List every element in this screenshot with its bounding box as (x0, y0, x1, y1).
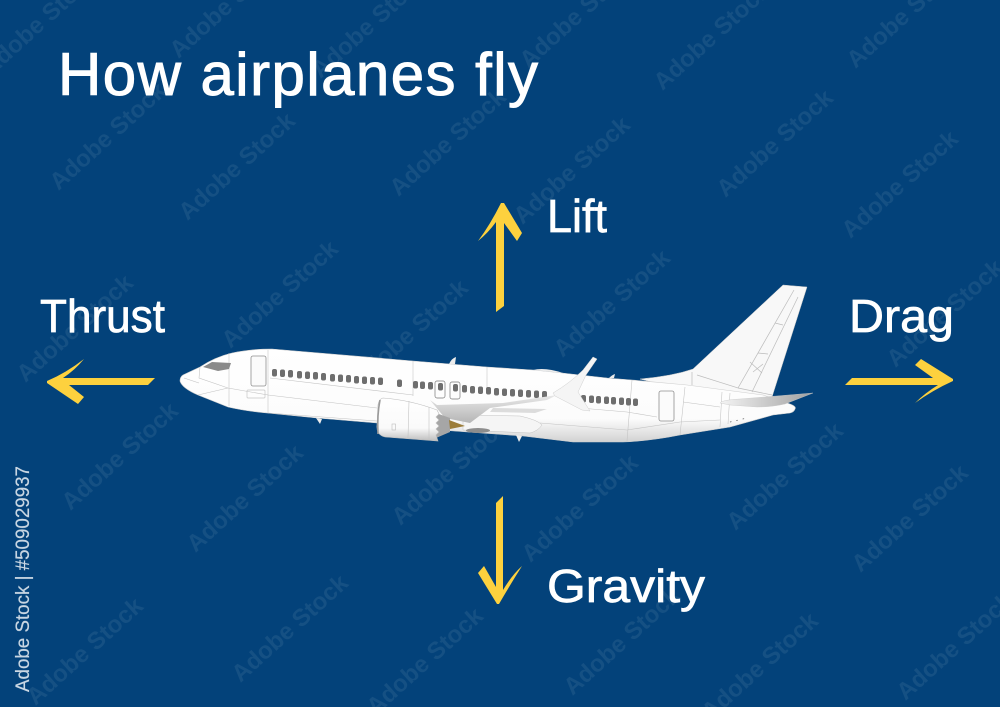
infographic canvas: Adobe Stock (721, 417, 849, 536)
label: Thrust: Thrust (40, 290, 165, 342)
aft door (659, 391, 674, 421)
infographic canvas: Adobe Stock (216, 235, 344, 354)
infographic canvas: Adobe Stock (181, 439, 309, 558)
infographic canvas: Adobe Stock (508, 111, 636, 230)
infographic canvas: Adobe Stock (173, 107, 301, 226)
infographic canvas: Adobe Stock (548, 244, 676, 363)
infographic canvas: Adobe Stock (21, 592, 149, 707)
flap fairing (463, 415, 542, 433)
infographic canvas: Adobe Stock (44, 77, 172, 196)
oval fairing (466, 428, 490, 433)
infographic canvas: Adobe Stock (56, 397, 184, 516)
horizontal stabilizer (720, 393, 813, 407)
infographic canvas: Adobe Stock (711, 84, 839, 203)
infographic canvas: Adobe Stock (558, 582, 686, 701)
infographic canvas: Adobe Stock (346, 274, 474, 393)
arrow: thrust (47, 359, 155, 404)
infographic canvas: Adobe Stock (226, 569, 354, 688)
wing (430, 357, 597, 423)
label: Lift: Lift (547, 190, 607, 242)
forward door (251, 356, 266, 386)
cabin windows (272, 369, 638, 406)
label: Drag: Drag (849, 290, 954, 342)
overwing exits (435, 381, 445, 398)
infographic canvas: Adobe Stock (846, 459, 974, 578)
infographic canvas: Adobe Stock (384, 83, 512, 202)
infographic canvas: Adobe Stock (386, 412, 514, 531)
airplane (180, 285, 813, 442)
arrow: lift (478, 203, 522, 312)
tail fin (640, 285, 807, 397)
infographic canvas: Adobe Stock (836, 125, 964, 244)
tail belly marks (730, 418, 747, 422)
arrow: drag (845, 359, 953, 403)
infographic canvas: Adobe Stock (516, 449, 644, 568)
engine (377, 398, 465, 441)
dorsal details and antennae (316, 357, 615, 442)
label: Gravity: Gravity (547, 560, 705, 612)
cockpit window (203, 362, 231, 371)
arrow: gravity (478, 496, 522, 604)
infographic canvas: Adobe Stock (11, 269, 139, 388)
title: How airplanes fly (58, 41, 538, 108)
fuselage (180, 349, 795, 442)
stock id vertical text: Adobe Stock | #509029937 (13, 466, 34, 692)
